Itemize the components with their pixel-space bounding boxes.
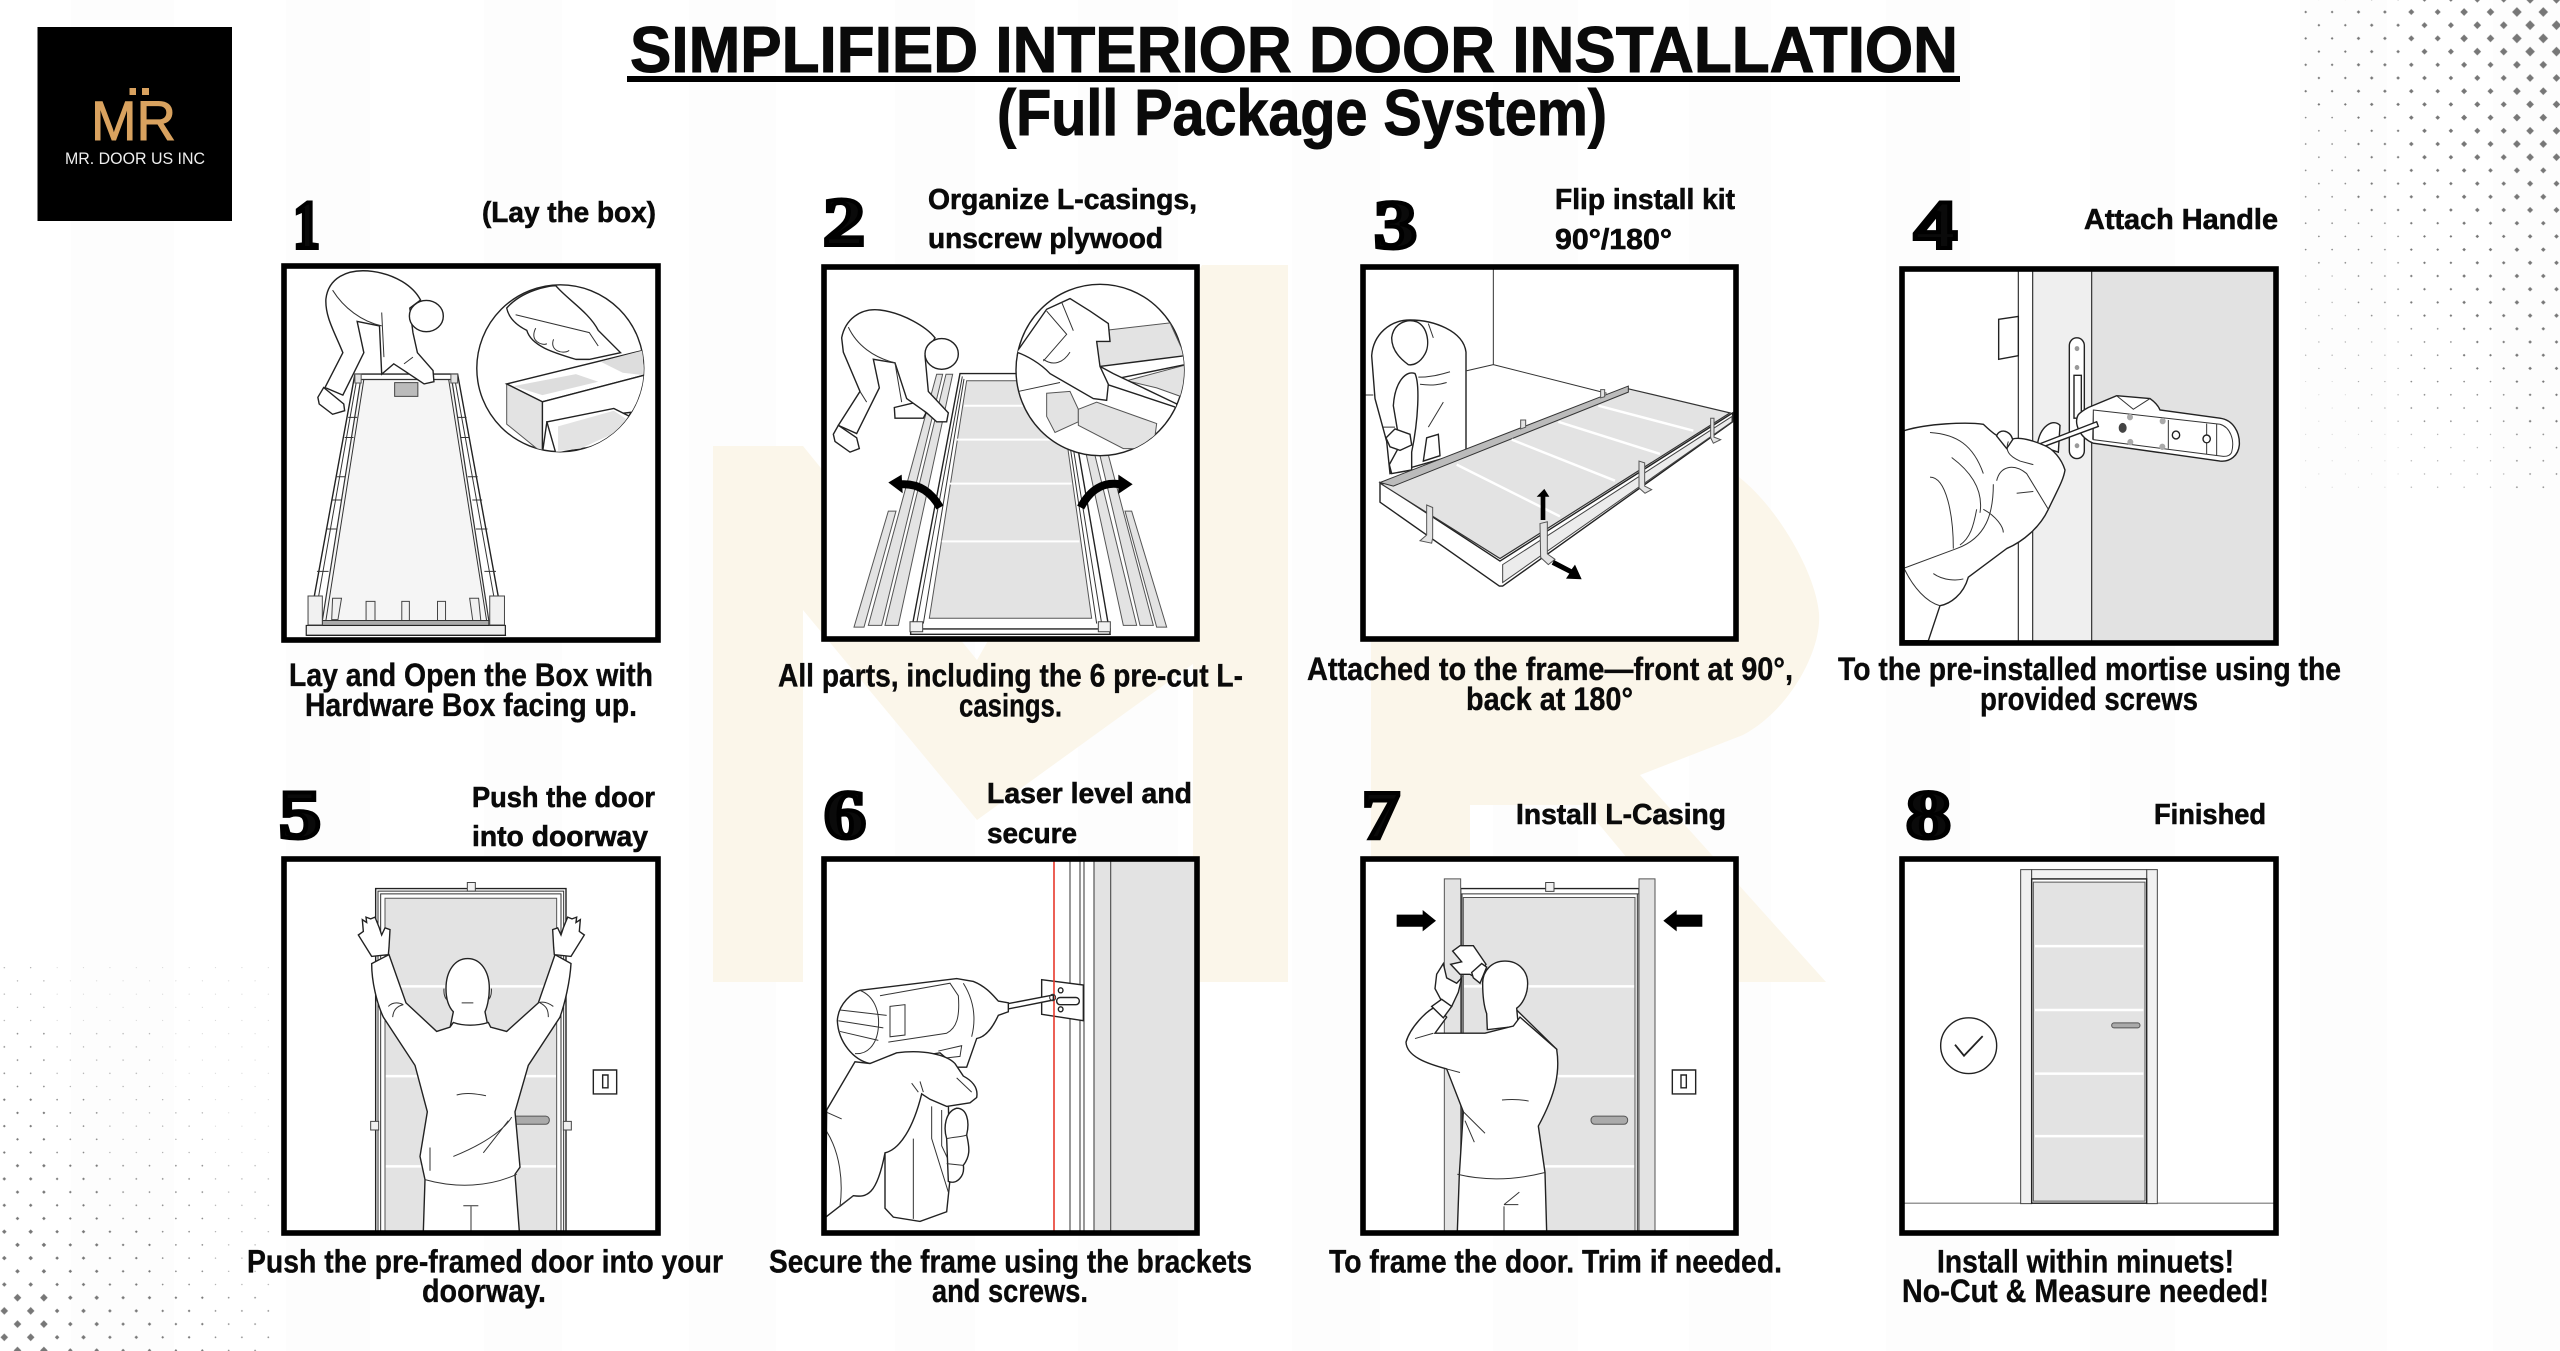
title: SIMPLIFIED INTERIOR DOOR INSTALLATION (630, 13, 1958, 86)
step 2 heading: Organize L-casings, (928, 184, 1197, 216)
step 5 caption: Push the pre-framed door into your (247, 1244, 723, 1280)
icon: left arrow (1663, 910, 1702, 931)
step 2 caption (778, 658, 1243, 724)
step 1 caption: Hardware Box facing up. (305, 687, 637, 723)
step 6 caption: and screws. (932, 1273, 1088, 1309)
step 7 heading: Install L-Casing (1516, 799, 1726, 831)
step 5 caption: doorway. (422, 1273, 546, 1309)
icon: upper glove (1451, 946, 1486, 979)
panel 2: organize L-casings (824, 267, 1197, 639)
panel 4: attach handle (1902, 269, 2276, 643)
step 8 caption: Install within minuets! (1937, 1244, 2234, 1280)
icon: up arrow (1537, 489, 1549, 520)
watermark: MR (713, 265, 1826, 982)
step 6 heading: Laser level and (987, 778, 1192, 810)
step 8 caption: No-Cut & Measure needed! (1902, 1273, 2269, 1309)
halftone dots: top right (2299, 0, 2560, 494)
step 6 heading: secure (987, 818, 1077, 850)
step 3 number: 3 (1374, 187, 1417, 263)
step 6 number: 6 (824, 777, 866, 853)
step 4 caption: To the pre-installed mortise using the (1838, 651, 2341, 687)
laser line (1053, 860, 1055, 1233)
step 3 caption (1307, 651, 1793, 717)
step 3 caption: back at 180° (1466, 681, 1633, 717)
panel 7: install L-casing (1363, 859, 1736, 1233)
step 6 (769, 777, 1252, 1309)
step 7 caption: To frame the door. Trim if needed. (1329, 1244, 1782, 1280)
step 8 number: 8 (1906, 777, 1951, 853)
step 1 heading: (Lay the box) (482, 197, 656, 229)
icon: check mark (1941, 1018, 1997, 1074)
icon: right curved arrow (1081, 475, 1133, 507)
icon: right arrow (1397, 910, 1436, 931)
step 6 caption: Secure the frame using the brackets (769, 1244, 1252, 1280)
step 1 (284, 187, 658, 723)
title: (Full Package System) (997, 76, 1607, 149)
icon: left curved arrow (888, 475, 940, 507)
step 2 number: 2 (823, 184, 865, 260)
panel 5: push the door (284, 859, 658, 1233)
step 4 caption: provided screws (1980, 681, 2198, 717)
step 6 heading (987, 778, 1192, 850)
step 5 heading: into doorway (472, 821, 648, 853)
step 5 heading: Push the door (472, 782, 655, 814)
step 8 heading: Finished (2154, 799, 2266, 831)
title (627, 13, 1960, 149)
panel 1: lay the box (284, 266, 658, 640)
logo: Mr. Door US Inc: MR (91, 89, 176, 152)
icon: lower glove (1435, 964, 1462, 1006)
step 3 heading: 90°/180° (1555, 224, 1672, 256)
step 4 number: 4 (1914, 187, 1957, 263)
step 2 caption: All parts, including the 6 pre-cut L- (778, 658, 1243, 694)
step 7 (1329, 777, 1782, 1280)
logo: Mr. Door US Inc: MR. DOOR US INC (65, 149, 205, 168)
panel 6: laser level and drill (824, 859, 1197, 1233)
step 3 (1307, 184, 1793, 717)
step 5 heading (472, 782, 655, 853)
icon: right glove (553, 917, 584, 956)
step 5 (247, 777, 723, 1309)
step 1 caption (289, 657, 653, 723)
step 5 number: 5 (279, 777, 321, 853)
step 5 caption (247, 1244, 723, 1309)
step 6 caption (769, 1244, 1252, 1309)
step 3 heading (1555, 184, 1735, 256)
step 2 heading: unscrew plywood (928, 223, 1163, 255)
step 8 (1902, 777, 2276, 1309)
step 1 caption: Lay and Open the Box with (289, 657, 653, 693)
step 4 (1838, 187, 2341, 717)
step 4 caption (1838, 651, 2341, 717)
step 2 caption: casings. (959, 688, 1062, 724)
halftone dots: bottom left (0, 961, 275, 1351)
step 2 heading (928, 184, 1197, 255)
logo: Mr. Door US Inc (38, 27, 232, 221)
step 1 number: 1 (293, 187, 320, 263)
step 2 (778, 184, 1243, 724)
icon: out arrow (1552, 560, 1582, 579)
step 4 heading: Attach Handle (2084, 204, 2278, 236)
panel 8: finished door (1902, 859, 2276, 1233)
panel 3: flip install kit (1363, 267, 1736, 639)
step 7 number: 7 (1362, 777, 1400, 853)
step 8 caption (1902, 1244, 2269, 1309)
icon: left glove (358, 917, 390, 956)
step 3 caption: Attached to the frame—front at 90°, (1307, 651, 1793, 687)
step 3 heading: Flip install kit (1555, 184, 1735, 216)
